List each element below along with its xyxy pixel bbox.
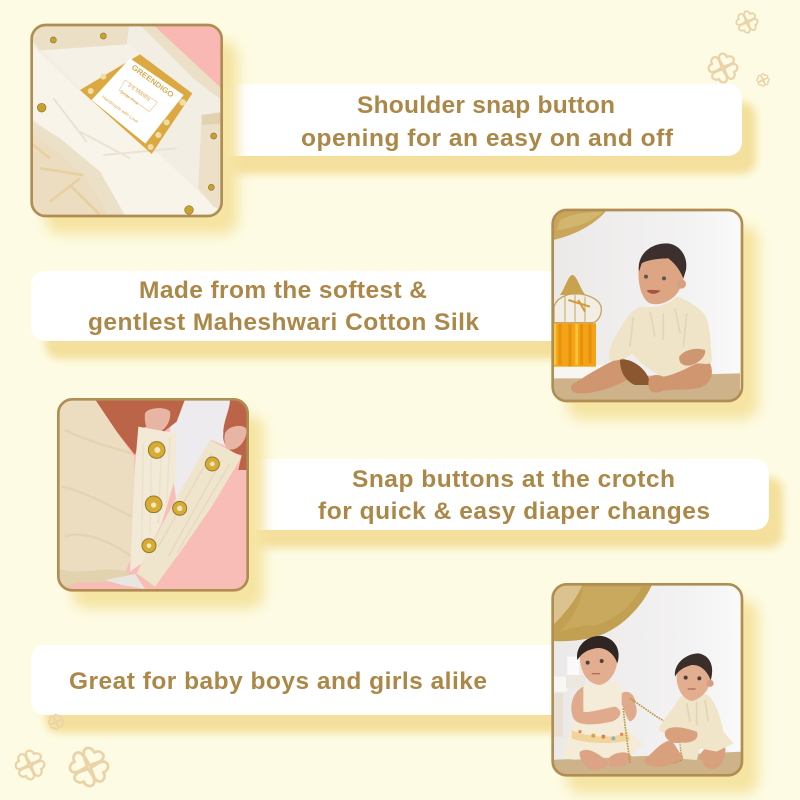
- caption 3: [318, 466, 710, 525]
- gold inner fabric: [80, 54, 192, 154]
- caption 1: [301, 92, 674, 152]
- right flap: [198, 112, 220, 208]
- baby legs: [571, 358, 633, 393]
- snap buttons: [37, 33, 217, 214]
- baby one arms: [571, 687, 620, 724]
- floor rug: [554, 752, 741, 774]
- baby dress: [609, 297, 712, 377]
- baby head: [638, 258, 685, 304]
- caption 3: for quick & easy diaper changes: [318, 498, 710, 525]
- baby two head: [677, 662, 712, 701]
- baby two legs: [643, 740, 683, 767]
- birdcage: [554, 293, 601, 323]
- candle stand: [567, 657, 579, 675]
- text bar 4 background: [31, 645, 571, 715]
- caption 2: gentlest Maheshwari Cotton Silk: [88, 309, 479, 336]
- left garment body: [60, 400, 134, 572]
- text bar 2 background: [31, 271, 571, 341]
- bead string: [623, 698, 682, 763]
- baby one head: [580, 648, 618, 685]
- hand left: [95, 399, 185, 455]
- photo: shoulder snap button and garment label: [30, 24, 246, 241]
- marigold garland: [550, 323, 596, 367]
- photo: crotch snap buttons held by hands: [57, 398, 272, 616]
- baby one legs: [580, 750, 608, 770]
- photo: two babies sitting with beads: [551, 583, 765, 800]
- inner lining folds: [33, 47, 220, 218]
- caption 3: Snap buttons at the crotch: [352, 466, 675, 493]
- caption 2: Made from the softest &: [139, 277, 427, 304]
- white inner fabric: [170, 400, 230, 498]
- hand right: [223, 399, 248, 470]
- top shoulder flap: [30, 25, 129, 50]
- gold curtain: [554, 586, 652, 642]
- caption 1: Shoulder snap button: [357, 92, 615, 119]
- right placket: [137, 440, 242, 587]
- baby two dress: [658, 694, 733, 760]
- caption 1: opening for an easy on and off: [301, 125, 674, 152]
- neck trim: [140, 25, 223, 102]
- floor rug: [554, 373, 740, 400]
- hair: [639, 243, 686, 278]
- text bar 3 background: [230, 459, 769, 530]
- photo: shoulder snap button and garment label: Handmade with Love: [101, 94, 140, 124]
- photo: shoulder snap button and garment label: 3-6 Months: [126, 82, 152, 103]
- bottom left fabric: [33, 122, 124, 215]
- photo: shoulder snap button and garment label: GREENDIGO: [130, 63, 176, 99]
- caption 2: [88, 277, 479, 336]
- baby one body: [562, 682, 643, 762]
- snap buttons: [142, 442, 219, 553]
- pink backdrop: [154, 26, 220, 88]
- white brand label: [92, 58, 184, 144]
- baby hand: [679, 349, 705, 366]
- photo: shoulder snap button and garment label: Smile Pink: [119, 89, 140, 106]
- text bar 1 background: [200, 84, 742, 156]
- photo: baby sitting in cotton silk outfit: [551, 208, 765, 426]
- center placket: [130, 427, 177, 572]
- gold drape: [554, 211, 606, 240]
- caption 4: Great for baby boys and girls alike: [69, 668, 487, 695]
- baby two hands: [665, 727, 698, 743]
- face: [644, 275, 648, 279]
